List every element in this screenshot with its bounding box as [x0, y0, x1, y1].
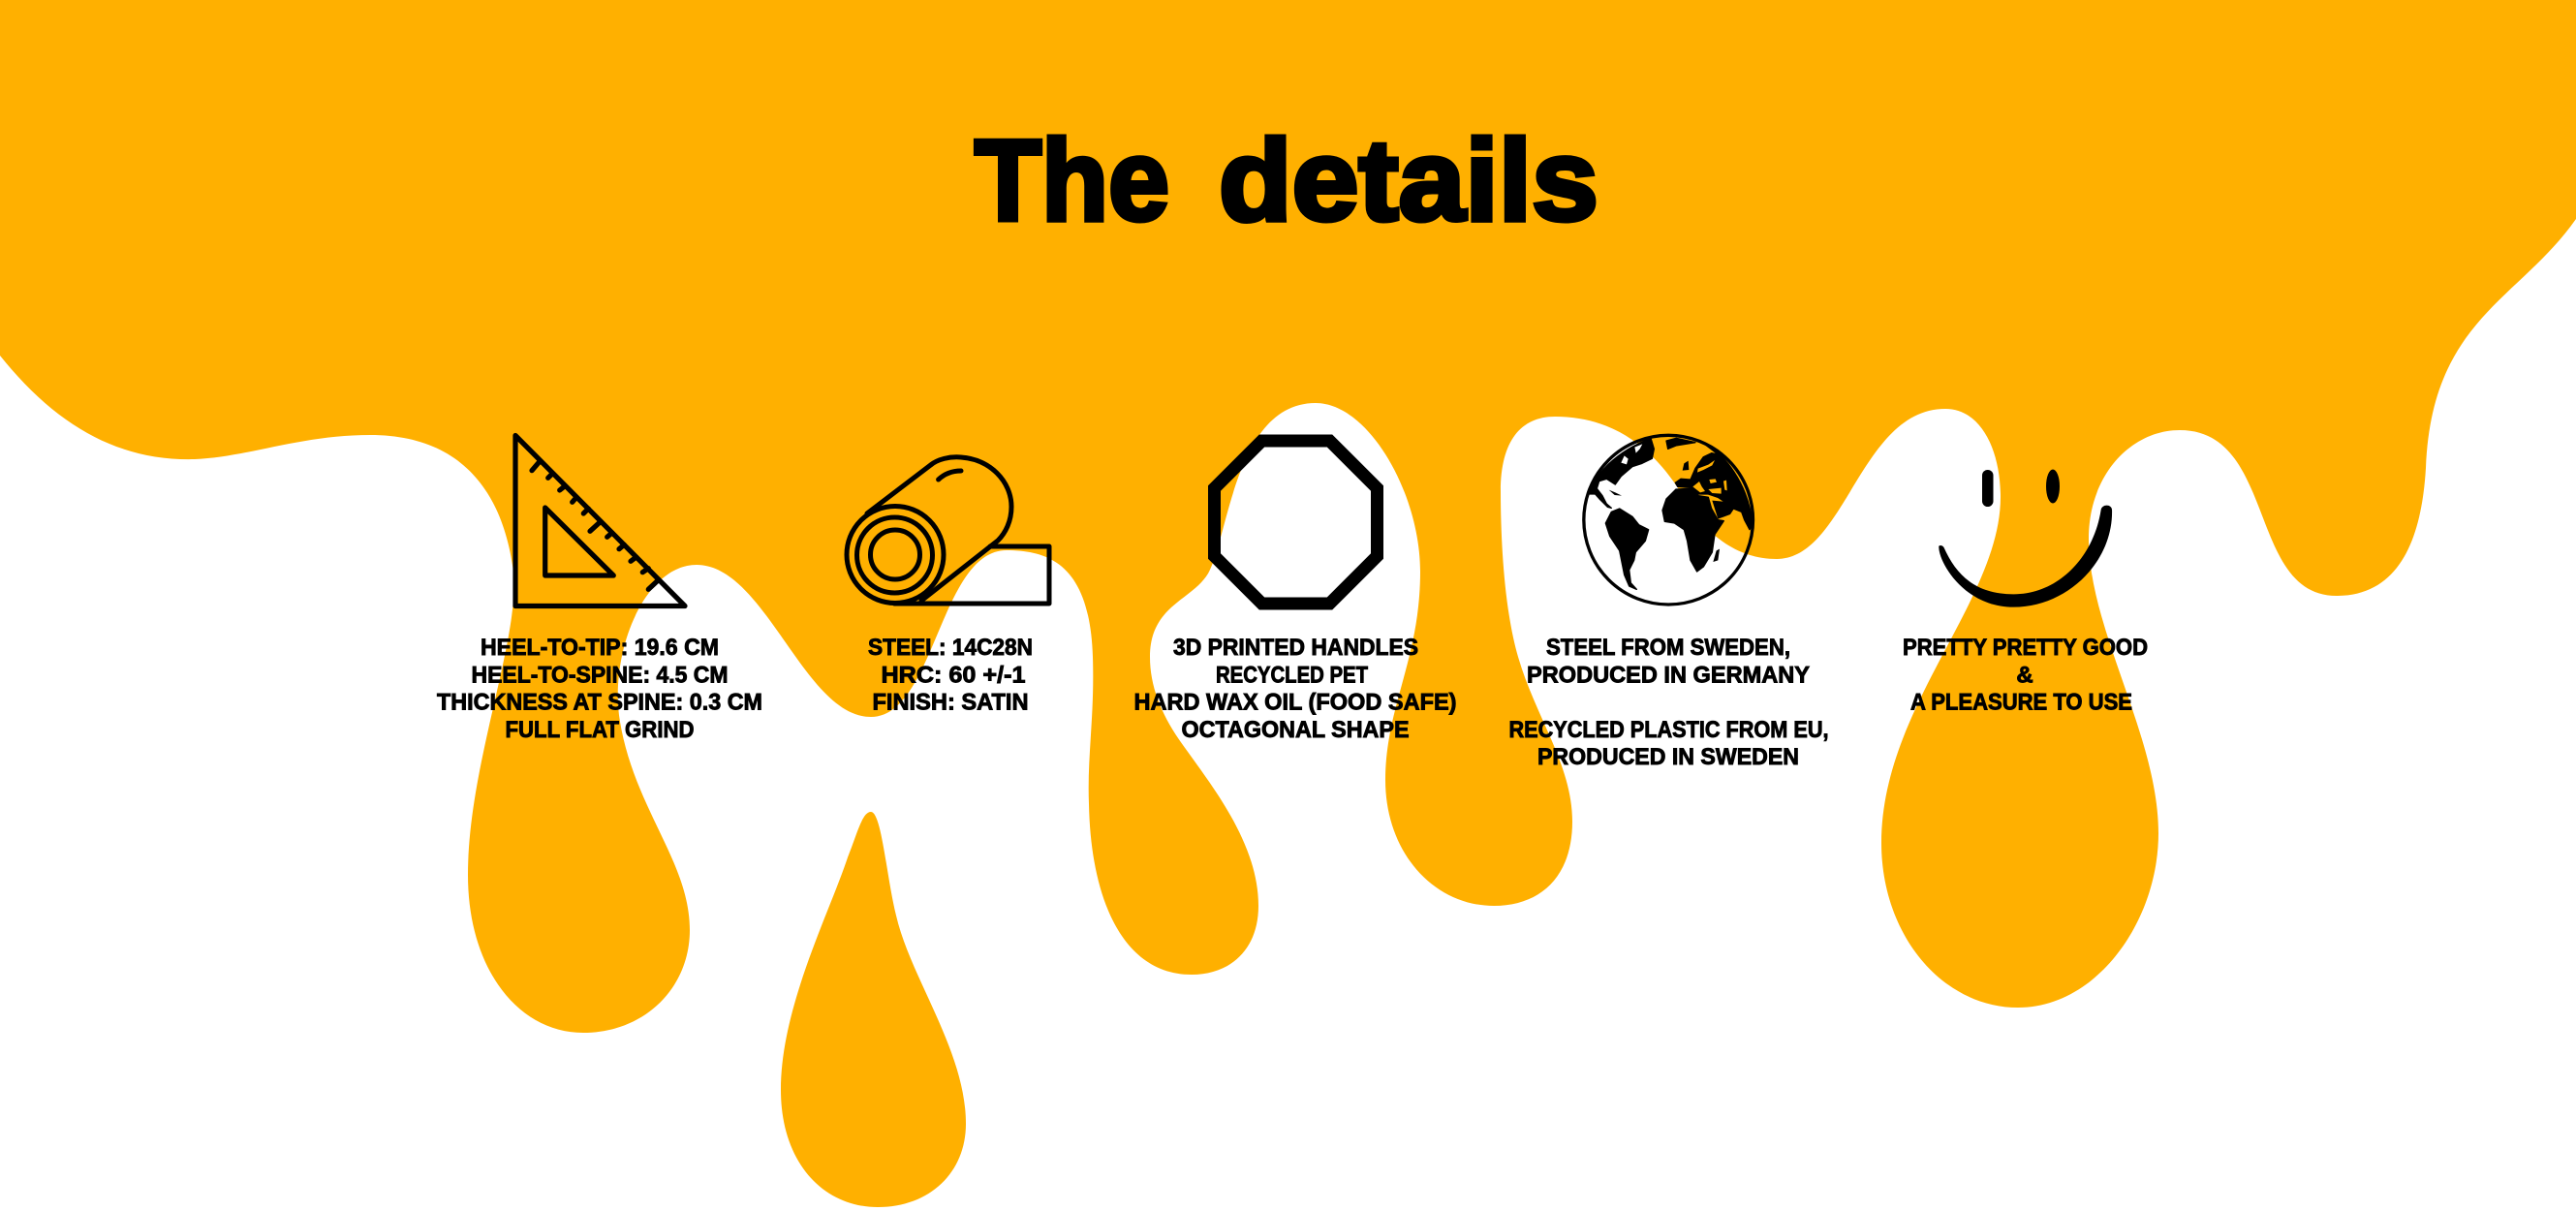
text: handle details: RECYCLED PET [1216, 662, 1368, 688]
text: pleasure to use: & [2016, 662, 2033, 688]
text: steel properties: FINISH: SATIN [872, 690, 1029, 715]
text: handle details: OCTAGONAL SHAPE [1182, 717, 1409, 743]
title [975, 116, 1598, 245]
text: steel properties [868, 635, 1033, 715]
icon: roll of steel [847, 457, 1049, 604]
text: knife dimensions: HEEL-TO-SPINE: 4.5 CM [471, 662, 729, 688]
text: steel properties: HRC: 60 +/-1 [882, 662, 1025, 688]
text: origin of materials: PRODUCED IN SWEDEN [1537, 744, 1799, 770]
title: details [1219, 116, 1598, 245]
text: handle details [1133, 635, 1457, 743]
icon: smiley face [1939, 469, 2112, 607]
icon: octagon handle [1215, 441, 1378, 604]
text: origin of materials: PRODUCED IN GERMANY [1527, 662, 1810, 688]
text: knife dimensions: FULL FLAT GRIND [506, 717, 694, 743]
text: handle details: 3D PRINTED HANDLES [1173, 635, 1418, 661]
text: knife dimensions [437, 635, 762, 743]
separate falling drop [781, 812, 966, 1207]
text: pleasure to use: PRETTY PRETTY GOOD [1903, 635, 2148, 661]
title: The [975, 116, 1169, 245]
text: origin of materials [1509, 635, 1829, 770]
text: origin of materials: STEEL FROM SWEDEN, [1546, 635, 1790, 661]
text: knife dimensions: THICKNESS AT SPINE: 0.3 CM [437, 690, 762, 715]
text: pleasure to use: A PLEASURE TO USE [1910, 690, 2132, 715]
text: origin of materials: RECYCLED PLASTIC FROM EU, [1509, 717, 1829, 743]
icon: set square ruler [515, 436, 685, 606]
text: steel properties: STEEL: 14C28N [868, 635, 1033, 661]
text: handle details: HARD WAX OIL (FOOD SAFE) [1133, 690, 1457, 715]
text: knife dimensions: HEEL-TO-TIP: 19.6 CM [481, 635, 719, 661]
icon: globe [1584, 435, 1753, 605]
text: pleasure to use [1903, 635, 2148, 715]
